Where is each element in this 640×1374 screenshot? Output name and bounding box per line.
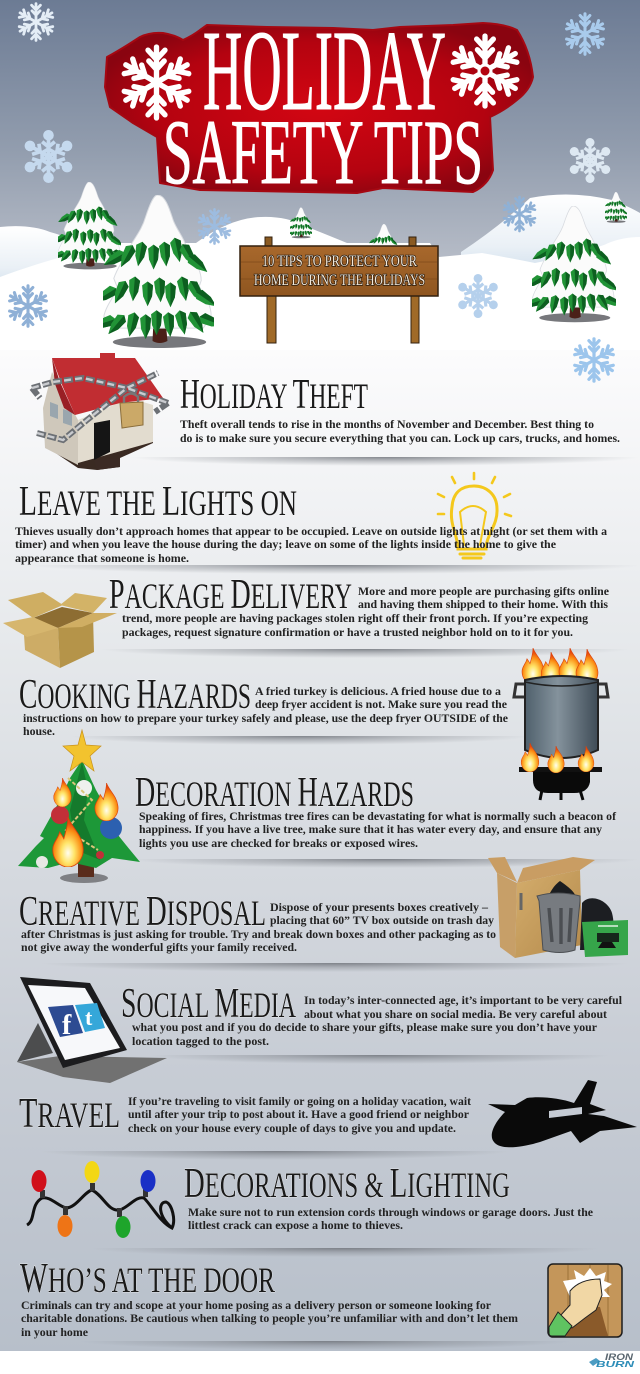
snowflake: right (570, 138, 610, 183)
sign text: 10 TIPS TO PROTECT YOUR (262, 253, 417, 270)
plane windows (549, 1107, 582, 1118)
body text: lights you use are checked for breaks or exposed wires. (139, 837, 418, 850)
body text: what you post and if you do decide to share your gifts, please make sure you don’t have your (132, 1021, 597, 1034)
icon: lightbulb (438, 473, 511, 558)
icon: chained house (32, 353, 168, 470)
tree: left (51, 182, 127, 269)
icon: airplane silhouette (488, 1080, 637, 1147)
body text (122, 585, 609, 639)
body text (188, 1206, 593, 1232)
body text: appearance that someone is home. (15, 552, 189, 565)
body text: Dispose of your presents boxes creatively – (270, 901, 488, 914)
heading: PACKAGE DELIVERY (109, 572, 352, 618)
snowflake: top right (565, 14, 605, 54)
panel: package delivery (3, 572, 609, 668)
panel: social media (17, 977, 623, 1083)
body text (21, 901, 496, 954)
body text: happiness. If you have a live tree, make sure that it has water every day, and ensure that any (139, 823, 602, 836)
snowflake: lower left (8, 286, 48, 326)
body text (15, 525, 607, 565)
padlock (120, 402, 143, 428)
icon: fist knocking on door (548, 1264, 622, 1337)
heading: DECORATIONS & LIGHTING (184, 1161, 510, 1207)
body text: do is to make sure you secure everything that you can. Lock up cars, trucks, and homes. (180, 432, 620, 445)
icon: TV box and trash (488, 857, 628, 958)
body text: instructions on how to prepare your turkey safely and please, use the deep fryer OUTSIDE of the (23, 712, 508, 725)
body text: charitable donations. Be cautious when talking to people you’re unfamiliar with and don’t let them (21, 1312, 518, 1325)
body text: location tagged to the post. (132, 1035, 269, 1048)
icon: open cardboard box (3, 592, 117, 668)
snowflake: lower centre (458, 274, 498, 318)
body text (180, 418, 620, 445)
body text: check on your house every couple of days to give you and update. (128, 1122, 456, 1135)
body text: In today’s inter-connected age, it’s important to be very careful (304, 994, 623, 1007)
icon: tablet (17, 977, 167, 1083)
icon: tablet: t (85, 1005, 93, 1030)
title snowflake left (122, 47, 191, 118)
body text: not give away the wonderful gifts your family received. (21, 941, 297, 954)
icon: tablet: f (62, 1010, 72, 1041)
tree: right (522, 206, 624, 322)
body text: about what you share on social media. Be very careful about (304, 1008, 607, 1021)
panel: leave the lights on (15, 473, 607, 565)
panel: who's at the door (20, 1256, 622, 1339)
body text: placing that 60” TV box outside on trash day (270, 914, 494, 927)
body text: Criminals can try and scope at your home posing as a delivery person or someone looking for (21, 1299, 491, 1312)
icon: flaming pot (514, 648, 608, 800)
sign: HOME DURING THE HOLIDAYS (254, 272, 425, 289)
sign (240, 237, 438, 343)
body text (21, 1299, 518, 1339)
body text (139, 810, 616, 850)
title blob (105, 23, 533, 193)
logo (589, 1352, 634, 1369)
body text: house. (23, 725, 55, 738)
body text: until after your trip to post about it. Have a good friend or neighbor (128, 1108, 469, 1121)
heading: DECORATION HAZARDS (135, 770, 414, 816)
body text (128, 1095, 471, 1135)
body text: littlest crack can expose a home to thieves. (188, 1219, 403, 1232)
snowflake: mid left (198, 209, 231, 244)
logo: BURN (596, 1360, 634, 1369)
tree: partly hidden (365, 224, 402, 266)
snowflake: top left (18, 4, 54, 40)
heading: WHO’S AT THE DOOR (20, 1256, 275, 1302)
body text: Theft overall tends to rise in the months of November and December. Best thing to (180, 418, 594, 431)
snowflake: left (25, 130, 72, 183)
body text: after Christmas is just asking for trouble. Try and break down boxes and other packaging as to (21, 928, 496, 941)
body text: Thieves usually don’t approach homes that appear to be occupied. Leave on outside lights at night (or set them with a (15, 525, 607, 538)
logo: IRON (605, 1352, 634, 1362)
heading: COOKING HAZARDS (19, 672, 251, 718)
body text: packages, request signature confirmation or have a trusted neighbor hold on to it for you. (122, 626, 573, 639)
body text: deep fryer accident is not. Make sure you read the (255, 698, 507, 711)
title snowflake right (451, 36, 519, 106)
heading: CREATIVE DISPOSAL (19, 889, 266, 935)
snowflake: lower right (573, 339, 615, 381)
body text: timer) and when you leave the house during the day; leave on some of the lights inside the home to give the (15, 538, 556, 551)
tree: large (90, 195, 225, 348)
chains (32, 373, 168, 440)
panel: travel (19, 1080, 637, 1147)
body text: trend, more people are having packages stolen right off their front porch. If you’re expecting (122, 612, 588, 625)
body text: A fried turkey is delicious. A fried house due to a (255, 685, 501, 698)
panel: holiday theft (32, 353, 620, 470)
tree: tiny centre (287, 208, 314, 238)
body text: Make sure not to run extension cords through windows or garage doors. Just the (188, 1206, 593, 1219)
body text: and having them shipped to their home. With this (358, 598, 608, 611)
body text: in your home (21, 1326, 88, 1339)
body text: If you’re traveling to visit family or going on a holiday vacation, wait (128, 1095, 471, 1108)
snowy hills (0, 194, 640, 350)
tree: tiny right (602, 192, 629, 223)
panel: decoration hazards (18, 730, 616, 883)
heading: TRAVEL (19, 1091, 120, 1137)
snowflake: mid right (503, 197, 536, 231)
panel: creative disposal (19, 857, 628, 958)
title (163, 7, 483, 203)
panel: decorations and lighting (27, 1161, 593, 1238)
heading: HOLIDAY THEFT (180, 372, 368, 418)
body text: More and more people are purchasing gifts online (358, 585, 609, 598)
body text: Speaking of fires, Christmas tree fires can be devastating for what is normally such a beacon of (139, 810, 616, 823)
heading: LEAVE THE LIGHTS ON (19, 479, 297, 525)
shadows beneath sections (30, 457, 640, 1359)
icon: string of lights (27, 1161, 174, 1238)
heading: SOCIAL MEDIA (121, 981, 296, 1027)
panel: cooking hazards (19, 648, 608, 800)
icon: burning christmas tree (18, 730, 140, 883)
body text (23, 685, 508, 738)
body text (132, 994, 623, 1048)
